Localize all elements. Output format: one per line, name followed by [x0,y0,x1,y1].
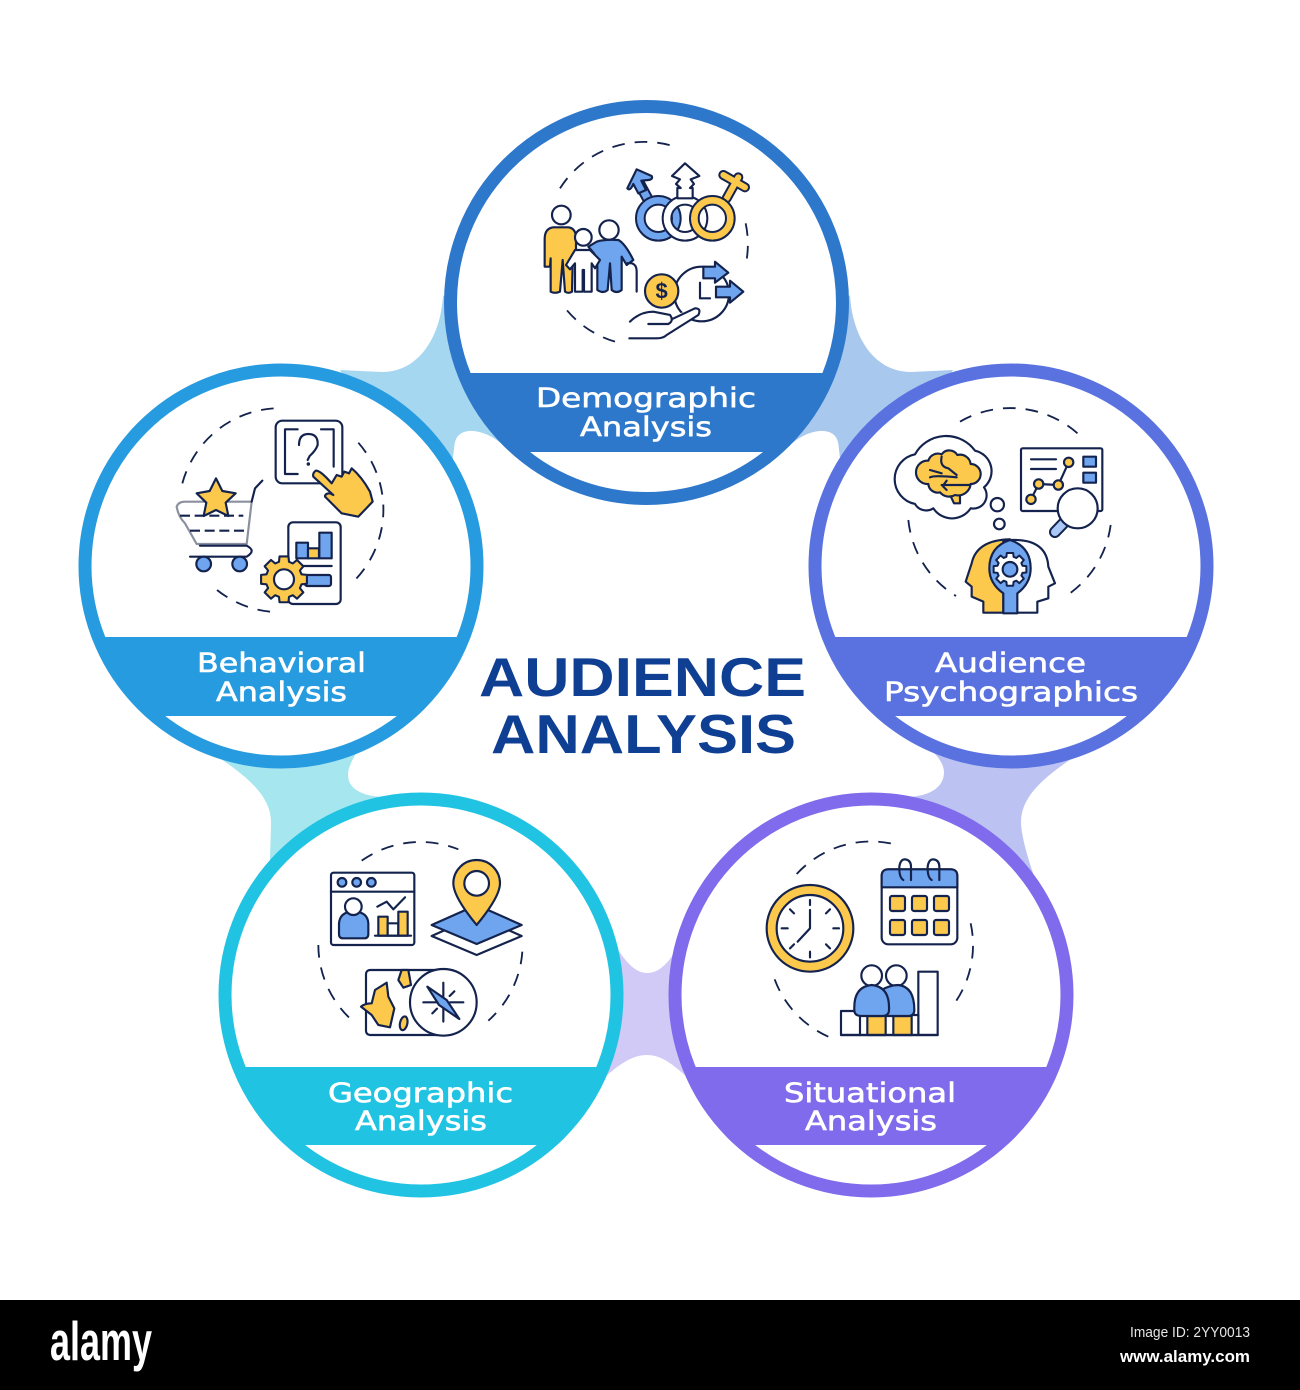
label [197,648,366,708]
ring [85,370,477,762]
ring [675,799,1067,1191]
website: www.alamy.com [1119,1347,1250,1366]
label: Psychographics [884,677,1138,708]
label [884,648,1138,708]
label band [835,637,1187,716]
icon: situation [767,841,973,1037]
connector: geographic to situational [606,940,686,1076]
image id: Image ID: 2YY0013 [1130,1324,1250,1341]
ring [815,370,1207,762]
footer bar [0,1300,1300,1390]
label: Analysis [216,677,347,708]
icon: geography [318,842,522,1036]
label: Analysis [805,1106,937,1137]
label [784,1078,956,1137]
label: Demographic [536,383,756,414]
panel: geographic analysis [215,799,625,1191]
title: AUDIENCE [479,646,806,708]
label [328,1078,513,1137]
connector: psychographics to situational [900,740,1077,884]
label: Situational [784,1078,956,1109]
panel: demographic analysis [440,106,850,498]
icon: psychographics [895,408,1111,613]
label: Audience [935,648,1086,679]
panel: behavioral analysis [75,370,485,762]
ring [450,106,842,498]
title [479,646,806,765]
label: Analysis [580,412,712,443]
label: Geographic [328,1078,513,1109]
label [536,383,756,443]
panel: situational analysis [665,799,1075,1191]
connector: demographic to behavioral [340,295,520,470]
icon: demographics [545,142,748,342]
icon: behavior [177,408,383,612]
panel: audience psychographics [805,370,1215,762]
label band [105,637,457,716]
connector: demographic to psychographics [773,295,953,470]
title: ANALYSIS [491,703,796,765]
label: Analysis [355,1106,487,1137]
icon: demographics: $ [656,279,668,304]
label band [696,1067,1046,1145]
label band [246,1067,596,1145]
connector: behavioral to geographic [215,740,392,864]
ring [225,799,617,1191]
label band [470,373,822,452]
label: Behavioral [197,648,366,679]
footer logo: alamy [50,1310,152,1372]
